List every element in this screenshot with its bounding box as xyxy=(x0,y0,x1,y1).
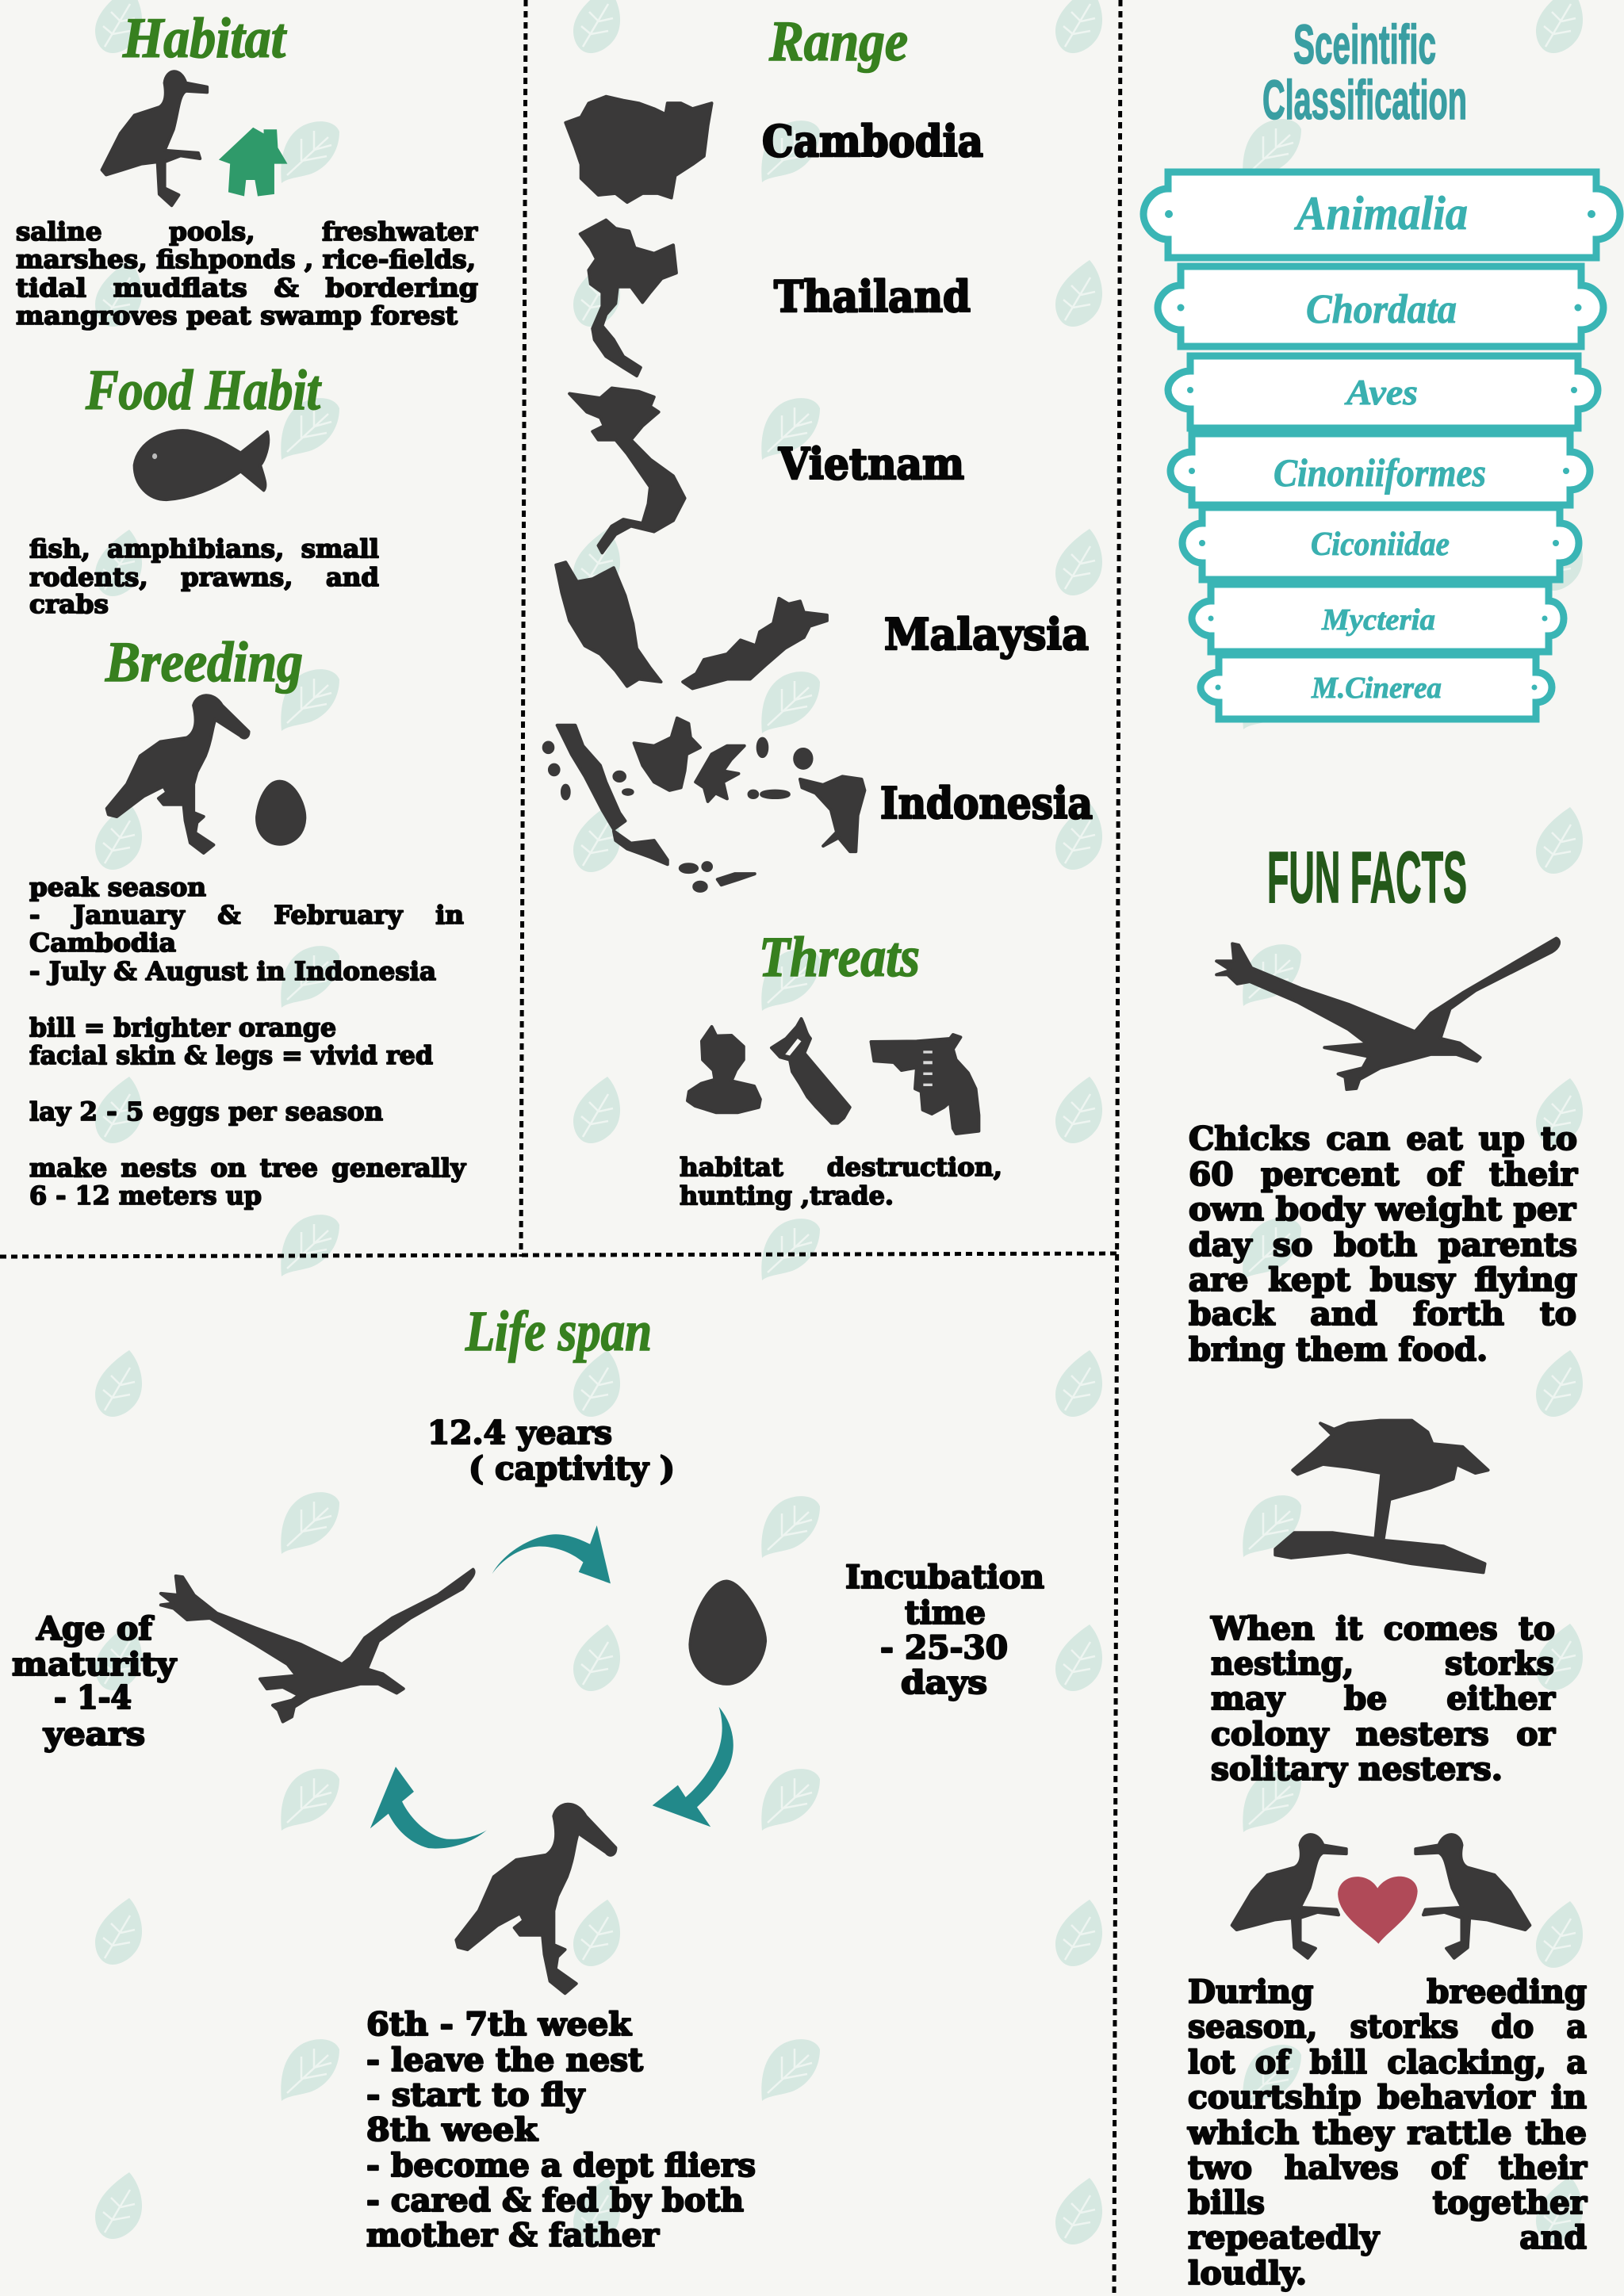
plaque: Cinoniiformes xyxy=(1170,434,1590,505)
icon: fish xyxy=(135,430,268,499)
text: habitat description: marshes, fishponds , rice-fields, xyxy=(16,244,476,274)
text: bill clacking fact xyxy=(1187,1973,1588,2292)
panel: threats xyxy=(680,925,1002,1211)
arrow: juvenile to adult xyxy=(370,1766,487,1849)
text: food description: fish, amphibians, small xyxy=(29,534,379,564)
text: chicks fact: Chicks can eat up to xyxy=(1189,1120,1577,1158)
text: chicks fact: day so both parents xyxy=(1189,1226,1577,1264)
text: bill clacking fact: two halves of their xyxy=(1188,2149,1588,2187)
map: Thailand xyxy=(580,220,676,376)
text: bill clacking fact: courtship behavior in xyxy=(1188,2079,1587,2116)
map: Indonesia xyxy=(544,718,864,891)
text: captivity lifespan: ( captivity ) xyxy=(469,1450,675,1487)
text: chicks fact: bring them food. xyxy=(1189,1331,1488,1368)
text: nesting fact: solitary nesters. xyxy=(1211,1751,1503,1788)
icon: egg xyxy=(257,782,304,844)
text: food description: crabs xyxy=(29,589,109,619)
text: breeding details: lay 2 - 5 eggs per season xyxy=(29,1096,383,1127)
text: food description: rodents, prawns, and xyxy=(29,562,379,592)
text: bill clacking fact: repeatedly and xyxy=(1188,2219,1587,2256)
arrow: adult to egg xyxy=(492,1525,611,1583)
icon: stork nesting on tree xyxy=(1275,1421,1488,1572)
heading: Threats: Threats xyxy=(759,925,920,989)
plaque: Ciconiidae: Ciconiidae xyxy=(1311,526,1450,563)
text: breeding details: make nests on tree generally xyxy=(29,1153,466,1183)
text: chicks fact: back and forth to xyxy=(1189,1295,1576,1333)
text: fledging stages: - leave the nest xyxy=(366,2042,644,2079)
text: threats description: habitat destruction, xyxy=(680,1152,1002,1182)
icon: stork with long bill xyxy=(107,695,249,853)
icon: person xyxy=(688,1027,760,1112)
heading: Food Habit: Food Habit xyxy=(85,358,322,422)
text: chicks fact: are kept busy flying xyxy=(1189,1261,1577,1299)
text: fledging stages: 8th week xyxy=(366,2111,538,2149)
map: Malaysia xyxy=(556,562,827,688)
plaque: Chordata xyxy=(1158,266,1603,346)
icon: flying stork xyxy=(1216,939,1559,1089)
text: age of maturity: - 1-4 xyxy=(54,1679,132,1716)
text: nesting fact xyxy=(1210,1610,1556,1788)
text: incubation time: - 25-30 xyxy=(880,1629,1008,1667)
text: nesting fact: When it comes to xyxy=(1210,1610,1555,1647)
text: breeding details: 6 - 12 meters up xyxy=(29,1181,262,1211)
text: fledging stages xyxy=(366,2006,756,2254)
icon: stork standing xyxy=(102,71,207,205)
panel: food habit xyxy=(29,358,379,619)
heading: Sceintific Classification xyxy=(1262,13,1467,131)
heading: Range: Range xyxy=(768,10,908,73)
text: incubation time: days xyxy=(901,1664,987,1701)
panel: breeding xyxy=(29,630,466,1211)
icon: egg xyxy=(690,1582,765,1684)
heading: Sceintific Classification: Sceintific xyxy=(1293,13,1436,75)
text: chicks fact: own body weight per xyxy=(1189,1191,1576,1228)
text: age of maturity: years xyxy=(43,1716,145,1753)
text: incubation time: Incubation xyxy=(845,1559,1044,1596)
plaque: Mycteria xyxy=(1192,584,1564,652)
label: Vietnam: Vietnam xyxy=(778,438,964,489)
text: habitat description: saline pools, freshwater xyxy=(16,216,478,247)
text: breeding details: - January & February in xyxy=(29,900,464,930)
text: fledging stages: 6th - 7th week xyxy=(366,2006,632,2043)
text: bill clacking fact: loudly. xyxy=(1188,2255,1307,2292)
text: age of maturity xyxy=(12,1610,178,1753)
text: breeding details xyxy=(29,872,466,1211)
plaque: Chordata: Chordata xyxy=(1306,287,1457,332)
panel: range xyxy=(544,10,1093,891)
text: breeding details: Cambodia xyxy=(29,928,176,958)
text: chicks fact xyxy=(1189,1120,1578,1368)
panel: scientific classification xyxy=(1143,13,1620,719)
text: fledging stages: - start to fly xyxy=(366,2076,586,2114)
arrow: egg to juvenile xyxy=(653,1707,733,1827)
text: nesting fact: nesting, storks xyxy=(1211,1645,1554,1682)
heading: Life span: Life span xyxy=(465,1299,652,1363)
plaque: Cinoniiformes: Cinoniiformes xyxy=(1274,450,1486,495)
text: fledging stages: - cared & fed by both xyxy=(366,2182,744,2219)
label: Malaysia: Malaysia xyxy=(884,609,1089,660)
panel: habitat xyxy=(16,6,478,331)
map: Cambodia xyxy=(565,97,712,202)
text: fledging stages: mother & father xyxy=(366,2217,660,2254)
plaque: M.Cinerea: M.Cinerea xyxy=(1311,672,1442,705)
text: breeding details: facial skin & legs = vivid red xyxy=(29,1040,433,1070)
text: chicks fact: 60 percent of their xyxy=(1189,1156,1578,1193)
icon: saw xyxy=(772,1019,850,1123)
text: incubation time xyxy=(845,1559,1044,1701)
plaque: M.Cinerea xyxy=(1201,655,1552,719)
text: bill clacking fact: which they rattle the xyxy=(1187,2114,1587,2152)
icon: juvenile stork xyxy=(456,1804,615,1993)
label: Cambodia: Cambodia xyxy=(762,116,983,166)
plaque: Aves xyxy=(1168,356,1598,428)
text: bill clacking fact: season, storks do a xyxy=(1188,2008,1587,2045)
icon: stork couple with heart xyxy=(1232,1835,1530,1958)
heading: Breeding: Breeding xyxy=(105,630,303,694)
icon: revolver xyxy=(871,1035,979,1134)
text: habitat description: tidal mudflats & bordering xyxy=(16,273,478,303)
panel: fun facts xyxy=(1187,837,1588,2292)
text: captivity lifespan xyxy=(427,1414,675,1487)
heading: Sceintific Classification: Classification xyxy=(1262,69,1467,131)
text: bill clacking fact: During breeding xyxy=(1188,1973,1587,2011)
plaque: Animalia: Animalia xyxy=(1293,187,1468,239)
plaque: Mycteria: Mycteria xyxy=(1321,603,1435,637)
text: incubation time: time xyxy=(905,1594,986,1632)
plaque: Aves: Aves xyxy=(1344,372,1418,412)
text: habitat description xyxy=(16,216,478,331)
text: fledging stages: - become a dept fliers xyxy=(366,2147,756,2184)
text: age of maturity: maturity xyxy=(12,1646,178,1683)
text: breeding details: peak season xyxy=(29,872,206,902)
text: breeding details: - July & August in Indonesia xyxy=(29,956,436,986)
icon: flying stork adult xyxy=(161,1570,474,1722)
icon: green house xyxy=(219,128,287,196)
text: threats description xyxy=(680,1152,1002,1211)
map: Vietnam xyxy=(569,388,685,553)
text: breeding details: bill = brighter orange xyxy=(29,1012,336,1043)
label: Thailand: Thailand xyxy=(774,271,971,322)
text: captivity lifespan: 12.4 years xyxy=(427,1414,612,1452)
heading: Habitat: Habitat xyxy=(122,6,287,70)
plaque: Ciconiidae xyxy=(1182,507,1579,580)
plaque: Animalia xyxy=(1143,172,1620,258)
text: threats description: hunting ,trade. xyxy=(680,1181,894,1211)
text: nesting fact: colony nesters or xyxy=(1211,1716,1556,1753)
text: age of maturity: Age of xyxy=(36,1610,155,1647)
panel: life span xyxy=(12,1299,1044,2254)
text: bill clacking fact: lot of bill clacking, a xyxy=(1188,2044,1587,2081)
text: habitat description: mangroves peat swamp forest xyxy=(16,300,458,331)
label: Indonesia: Indonesia xyxy=(880,778,1093,828)
text: bill clacking fact: bills together xyxy=(1188,2184,1588,2221)
text: food description xyxy=(29,534,379,619)
text: nesting fact: may be either xyxy=(1211,1680,1556,1717)
